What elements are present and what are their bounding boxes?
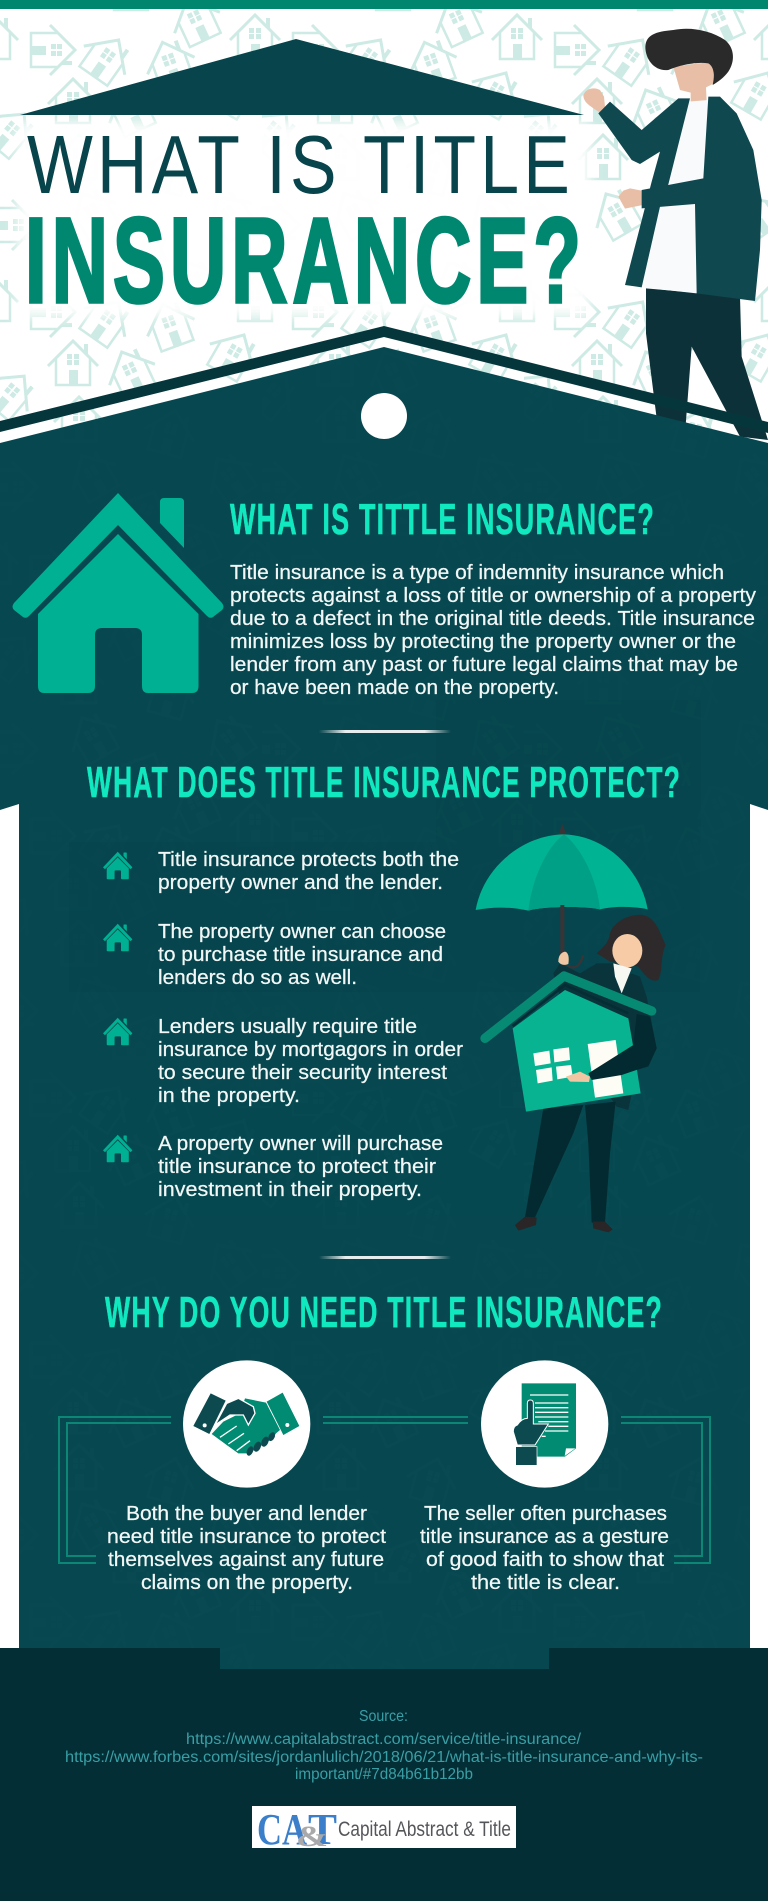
list item 1: property owner and the lender.: [158, 872, 443, 894]
roof triangle above title: [20, 39, 584, 115]
main house body background: [0, 347, 768, 1669]
footer: [0, 1648, 768, 1901]
list: what it protects: [103, 849, 463, 1201]
text: seller: [420, 1503, 669, 1594]
gable window circle: [361, 393, 407, 439]
text: buyer and lender: themselves against any future: [108, 1549, 384, 1571]
list item 2: lenders do so as well.: [158, 967, 357, 989]
text: seller: of good faith to show that: [426, 1549, 664, 1571]
icon: handshake: [183, 1360, 310, 1488]
list item 3: to secure their security interest: [158, 1062, 447, 1084]
top bar: [0, 0, 768, 9]
list item 2: to purchase title insurance and: [158, 944, 443, 966]
paragraph: definition: protects against a loss of title or ownership of a property: [230, 585, 756, 607]
illustration: man standing on roof: [583, 29, 768, 440]
text: buyer and lender: [107, 1503, 386, 1594]
list item 4: title insurance to protect their: [158, 1156, 436, 1178]
list item 3: insurance by mortgagors in order: [158, 1039, 463, 1061]
source text: https://www.forbes.com/sites/jordanlulich/2018/06/21/what-is-title-insurance-and-why-its-: [65, 1749, 703, 1766]
paragraph: definition: or have been made on the property.: [230, 677, 559, 699]
text: buyer and lender: need title insurance to protect: [107, 1526, 386, 1548]
text: seller: The seller often purchases: [424, 1503, 667, 1525]
logo: T: [308, 1805, 337, 1854]
source text: https://www.capitalabstract.com/service/title-insurance/: [186, 1731, 582, 1748]
list item 1: [103, 849, 459, 894]
paragraph: definition: minimizes loss by protecting the property owner or the: [230, 631, 736, 653]
list item 2: The property owner can choose: [158, 921, 446, 943]
logo: &: [296, 1820, 328, 1853]
list item 3: [103, 1016, 463, 1107]
logo: Capital Abstract & Title: [338, 1818, 511, 1841]
source text: Source:: [359, 1708, 408, 1725]
source text: [65, 1708, 703, 1783]
text: buyer and lender: claims on the property.: [141, 1572, 353, 1594]
icon: document with pointing hand: [481, 1360, 608, 1488]
text: seller: the title is clear.: [471, 1572, 620, 1594]
icon: green house: [12, 493, 224, 693]
paragraph: definition: due to a defect in the original title deeds. Title insurance: [230, 608, 755, 630]
white side strips: [0, 804, 768, 1648]
list item 3: in the property.: [158, 1085, 300, 1107]
list item 1: Title insurance protects both the: [158, 849, 459, 871]
text: buyer and lender: Both the buyer and lender: [126, 1503, 367, 1525]
paragraph: definition: [230, 562, 756, 699]
paragraph: definition: Title insurance is a type of indemnity insurance which: [230, 562, 724, 584]
illustration: woman with umbrella holding house: [476, 824, 666, 1232]
title: WHAT IS TITLE: [27, 118, 574, 211]
roof band: [0, 326, 768, 433]
list item 3: Lenders usually require title: [158, 1016, 417, 1038]
list item 2: [103, 921, 446, 989]
text: seller: title insurance as a gesture: [420, 1526, 669, 1548]
list item 4: investment in their property.: [158, 1179, 422, 1201]
logo: CA: [257, 1805, 307, 1854]
title: [25, 118, 586, 328]
source text: important/#7d84b61b12bb: [295, 1766, 473, 1783]
list item 4: A property owner will purchase: [158, 1133, 443, 1155]
paragraph: definition: lender from any past or future legal claims that may be: [230, 654, 738, 676]
logo: [252, 1805, 516, 1854]
list item 4: [103, 1133, 443, 1201]
